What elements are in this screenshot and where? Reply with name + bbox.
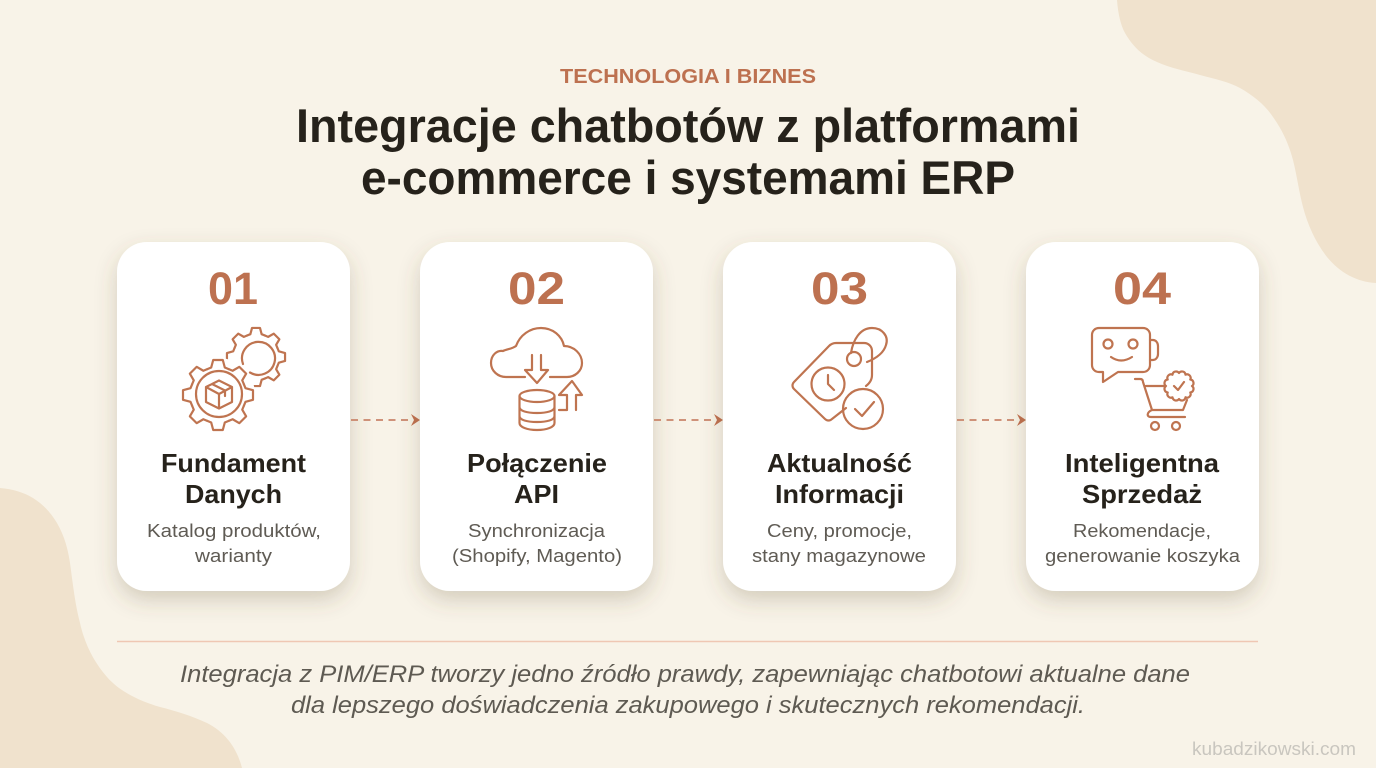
title [296, 100, 1080, 205]
panel: step 4: Sprzedaż [1082, 479, 1202, 509]
description: Ceny, promocje, [767, 521, 912, 541]
panel: step 3: stany magazynowe [752, 546, 926, 566]
title: e-commerce i systemami ERP [361, 152, 1015, 205]
decorative blob: bottom left [0, 488, 242, 768]
footer summary text: Integracja z PIM/ERP tworzy jedno źródło prawdy, zapewniając chatbotowi aktualne dane [180, 661, 1190, 688]
number 04: 04 [1113, 263, 1171, 314]
arrow 1 to 2 [351, 414, 420, 426]
icon: chatbot and cart [1092, 328, 1193, 430]
arrow 3 to 4 [957, 414, 1026, 426]
number 03: 03 [811, 263, 868, 314]
panel: step 1: warianty [194, 546, 272, 566]
description: Rekomendacje, [1073, 521, 1211, 541]
heading: Fundament [161, 448, 306, 478]
panel: step 4: generowanie koszyka [1045, 546, 1241, 566]
panel: step 2 [420, 242, 653, 591]
watermark: kubadzikowski.com [1192, 739, 1356, 759]
icon: gears with box [183, 328, 285, 430]
panel: step 1 [117, 242, 350, 591]
description: Katalog produktów, [147, 521, 321, 541]
number 02: 02 [508, 263, 565, 314]
description: Synchronizacja [468, 521, 606, 541]
title: Integracje chatbotów z platformami [296, 100, 1080, 153]
icon: cloud and database [491, 328, 582, 430]
heading: Inteligentna [1065, 448, 1220, 478]
heading: Połączenie [467, 448, 607, 478]
panel: step 2: API [514, 479, 559, 509]
footer summary text [180, 661, 1190, 719]
footer summary text: dla lepszego doświadczenia zakupowego i skutecznych rekomendacji. [291, 692, 1085, 719]
panel: step 2: (Shopify, Magento) [452, 546, 622, 566]
panel: step 3: Informacji [775, 479, 904, 509]
icon: price tag with clock and check [792, 328, 887, 429]
eyebrow heading: TECHNOLOGIA I BIZNES [560, 66, 816, 88]
decorative blob: top right [1117, 0, 1376, 283]
panel: step 1: Danych [185, 479, 282, 509]
number 01: 01 [208, 263, 258, 314]
heading: Aktualność [767, 448, 912, 478]
arrow 2 to 3 [654, 414, 723, 426]
panel: step 4 [1026, 242, 1259, 591]
panel: step 3 [723, 242, 956, 591]
